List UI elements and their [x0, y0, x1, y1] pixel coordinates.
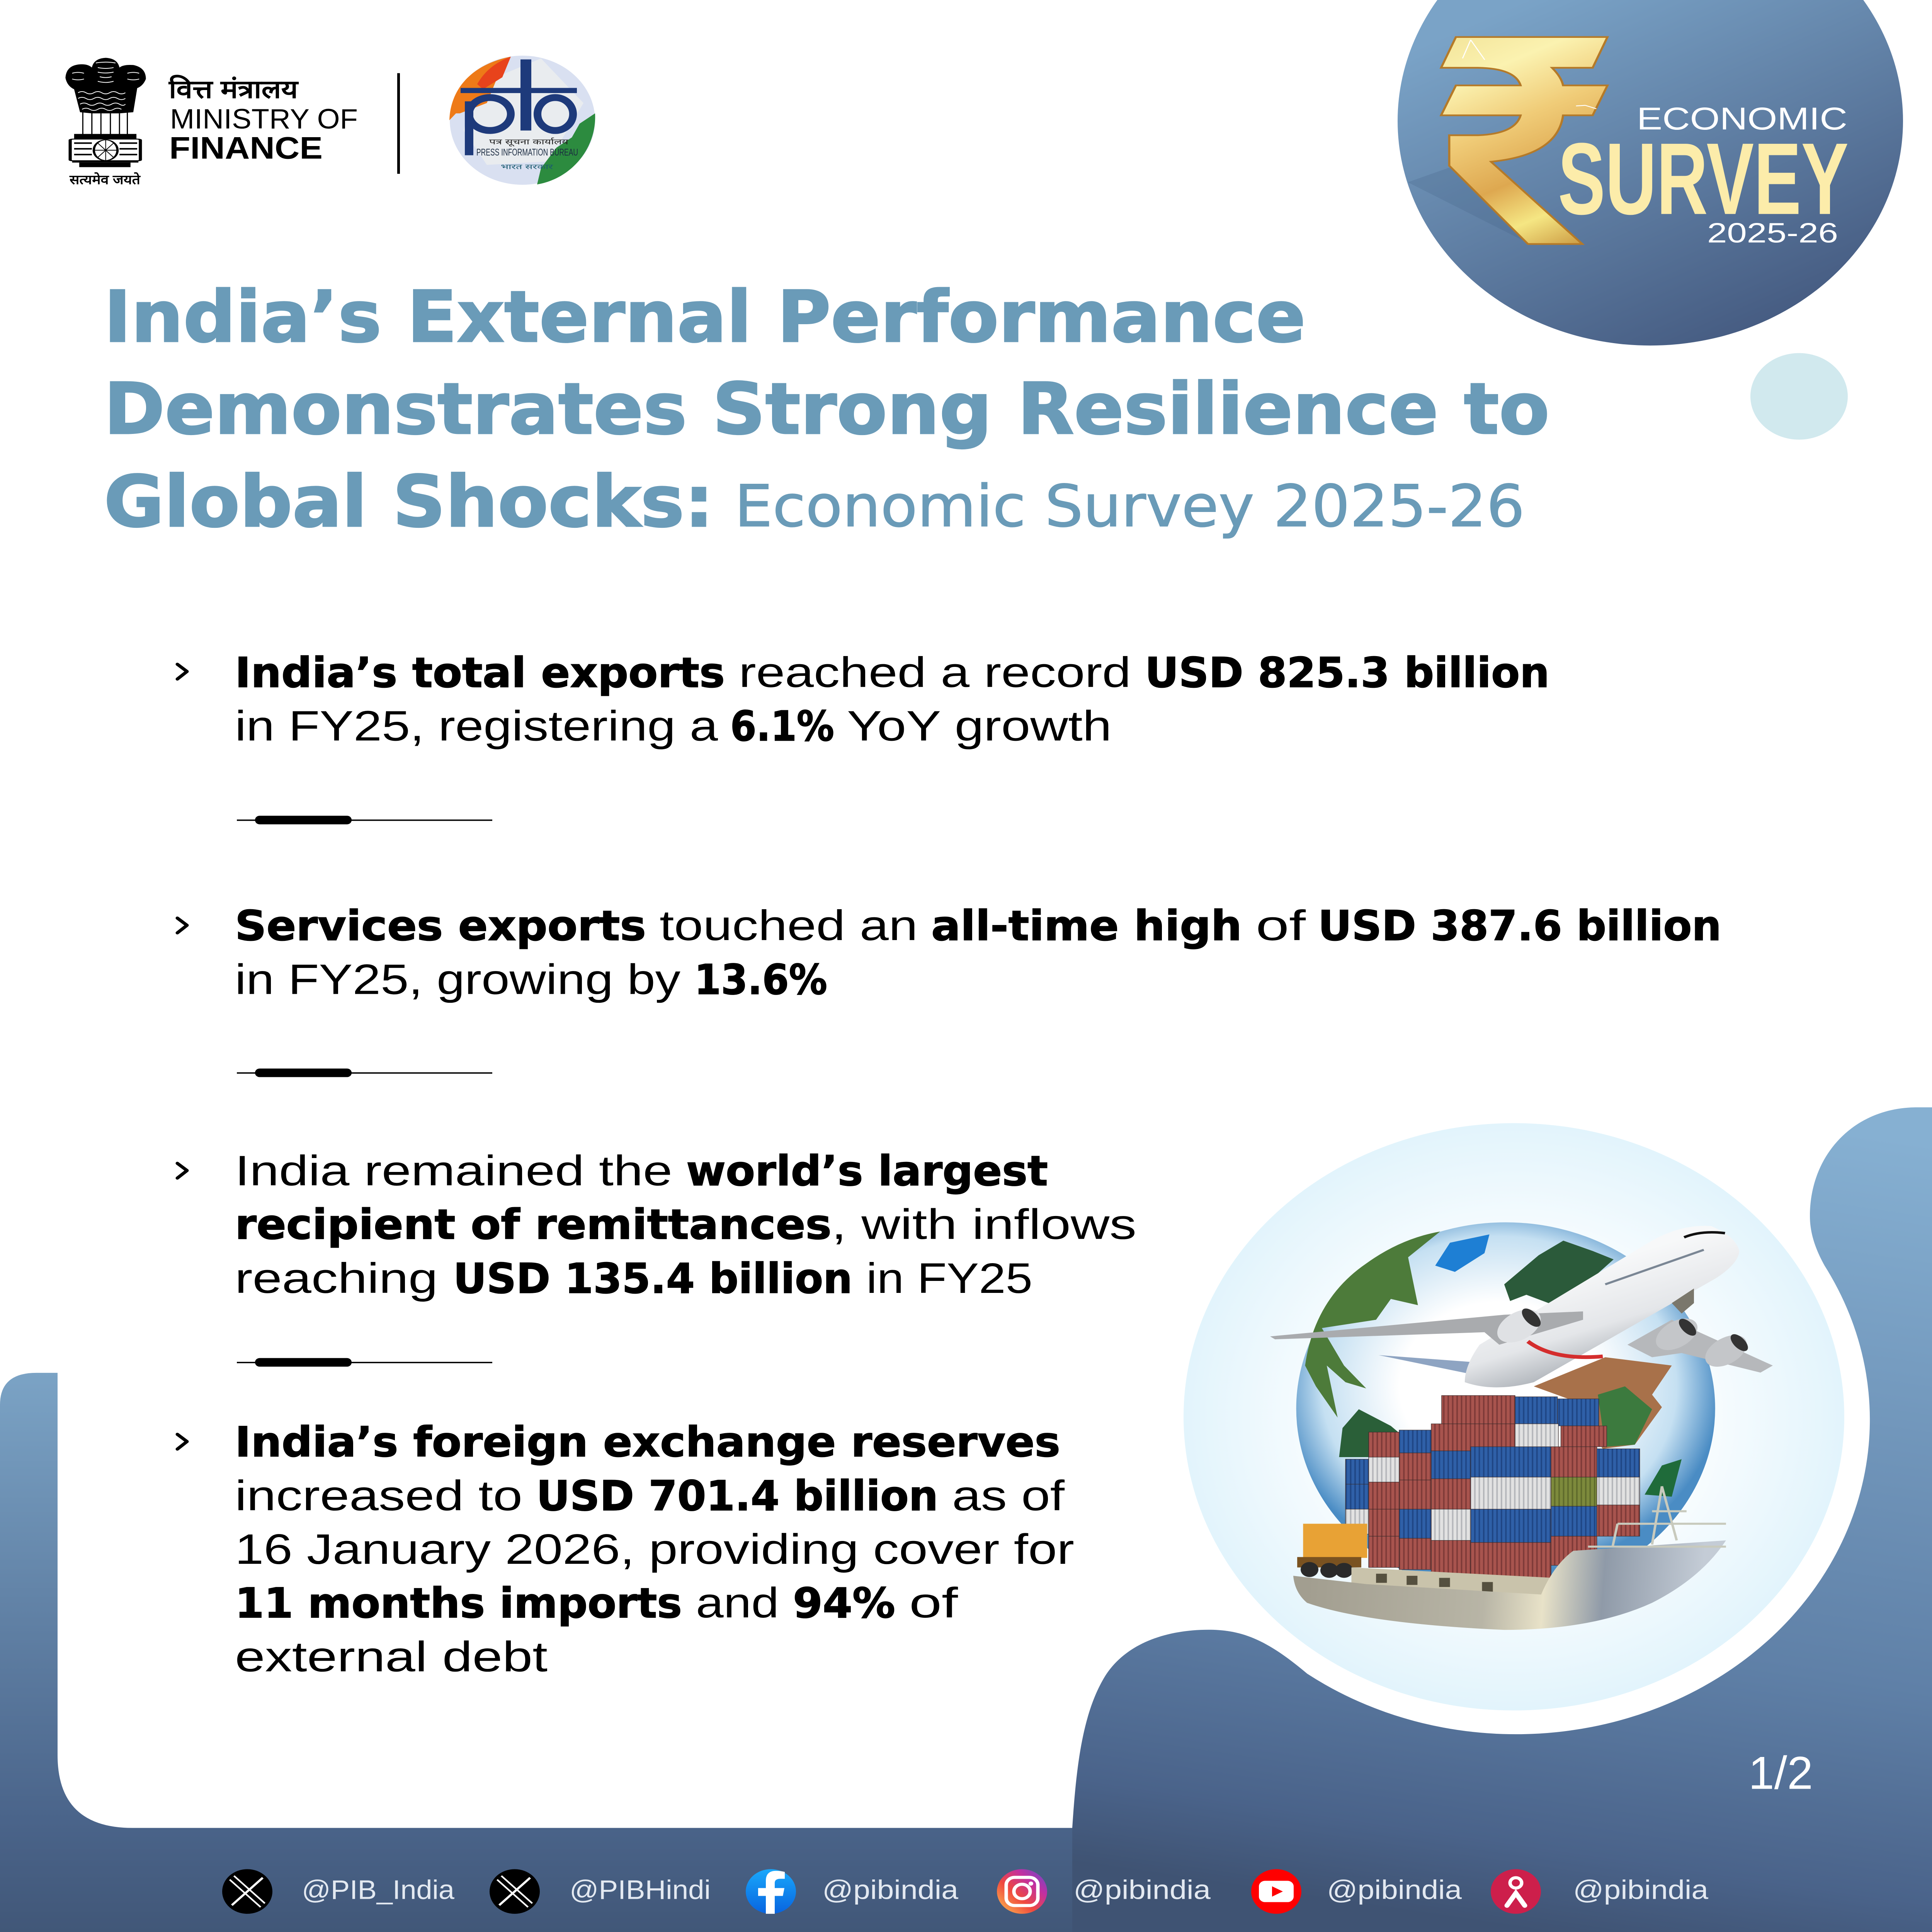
bullet 4: forex reserves: external debt [235, 1633, 548, 1680]
bullet 3: remittances: world’s largest [686, 1147, 1048, 1195]
bullet 3: remittances: in FY25 [866, 1254, 1032, 1302]
bullet 1: total exports: USD 825.3 billion [1145, 649, 1549, 697]
logo: PIB [449, 56, 595, 185]
cargo containers [1345, 1396, 1640, 1578]
divider 2 [237, 1068, 492, 1077]
bullet 1: total exports: in FY25, registering a [235, 702, 718, 750]
handle: PIB_India: @PIB_India [302, 1875, 455, 1905]
icon: Facebook [746, 1869, 796, 1914]
bullet 3: remittances: reaching [235, 1254, 438, 1302]
bullet 4: forex reserves: USD 701.4 billion [536, 1472, 938, 1520]
logo: PIB: PRESS INFORMATION BUREAU [476, 147, 578, 158]
bullet 4: forex reserves: India’s foreign exchange reserves [235, 1418, 1060, 1466]
icon: gold rupee symbol [1408, 37, 1607, 244]
emblem motto: सत्यमेव जयते [69, 172, 141, 187]
handle: Facebook: @pibindia [822, 1875, 959, 1905]
illustration: globe, plane, containers and ship [1270, 1222, 1773, 1630]
bullet 4: forex reserves: 94% [793, 1579, 895, 1627]
bullet 3: remittances: recipient of remittances [235, 1201, 832, 1249]
icon: X [222, 1869, 272, 1914]
logo: PIB: पत्र सूचना कार्यालय [489, 137, 569, 146]
page number: 1/2 [1748, 1747, 1813, 1799]
bullet 2: services exports: Services exports [235, 902, 646, 950]
ship [1293, 1486, 1726, 1630]
bullet 4: forex reserves: of [909, 1579, 958, 1626]
bullet 4: forex reserves [177, 1418, 1074, 1680]
bullet 3: remittances: USD 135.4 billion [453, 1255, 852, 1303]
title: Economic Survey 2025-26 [735, 473, 1525, 540]
icon: Instagram [997, 1869, 1047, 1914]
title: India’s External Performance [104, 276, 1306, 358]
finance label: FINANCE [169, 131, 323, 166]
airplane [1270, 1226, 1773, 1388]
divider 3 [237, 1358, 492, 1367]
bullet 4: forex reserves: 11 months imports [235, 1579, 682, 1627]
logo divider [397, 73, 400, 174]
title: Demonstrates Strong Resilience to [104, 368, 1549, 450]
bullet 2: services exports [177, 901, 1721, 1004]
icon: national emblem [65, 58, 146, 167]
handle: PIBHindi: @PIBHindi [570, 1875, 711, 1905]
bullet 3: remittances: , with inflows [832, 1201, 1136, 1248]
bullet 2: services exports: touched an [660, 901, 918, 949]
bullet 1: total exports: India’s total exports [235, 649, 725, 697]
footer social handles [222, 1869, 1709, 1914]
truck [1297, 1524, 1367, 1578]
bullet 1: total exports [177, 648, 1549, 750]
hindi ministry name: वित्त मंत्रालय [168, 75, 299, 103]
right blob background [1072, 1107, 1932, 1932]
bullet 2: services exports: all-time high [931, 902, 1242, 950]
bullet 2: services exports: 13.6% [694, 956, 827, 1004]
bullet 4: forex reserves: and [696, 1579, 779, 1626]
badge: Economic Survey [1398, 0, 1903, 345]
bullet 2: services exports: of [1256, 901, 1306, 949]
bullet 3: remittances: India remained the [235, 1147, 672, 1194]
economic label: ECONOMIC [1637, 101, 1847, 136]
icon: X Hindi [490, 1869, 540, 1914]
icon: ShareChat style [1491, 1869, 1541, 1914]
bullet 3: remittances [177, 1147, 1136, 1303]
globe [1296, 1222, 1715, 1595]
bullet 1: total exports: reached a record [739, 648, 1131, 696]
title: Global Shocks: [104, 461, 714, 543]
bullet 1: total exports: 6.1% [730, 702, 834, 750]
bullet 2: services exports: in FY25, growing by [235, 956, 680, 1003]
illustration circle background [1184, 1123, 1844, 1711]
handle: YouTube: @pibindia [1327, 1875, 1462, 1905]
bullet 4: forex reserves: increased to [235, 1472, 522, 1519]
title [104, 276, 1549, 543]
handle: Instagram: @pibindia [1073, 1875, 1211, 1905]
left band and footer background [0, 1373, 1082, 1932]
bullet 4: forex reserves: 16 January 2026, providing cover for [235, 1526, 1074, 1573]
english ministry name: MINISTRY OF [170, 104, 358, 134]
bullet 2: services exports: USD 387.6 billion [1318, 902, 1721, 950]
bullet 1: total exports: YoY growth [847, 702, 1112, 750]
year label: 2025-26 [1707, 218, 1838, 249]
decorative circle [1750, 353, 1848, 440]
icon: YouTube [1251, 1869, 1301, 1914]
logo: Ministry of Finance [65, 58, 358, 187]
handle: ShareChat style: @pibindia [1573, 1875, 1709, 1905]
logo: PIB: भारत सरकार [501, 163, 554, 171]
divider 1 [237, 816, 492, 824]
bullet 4: forex reserves: as of [952, 1472, 1065, 1519]
